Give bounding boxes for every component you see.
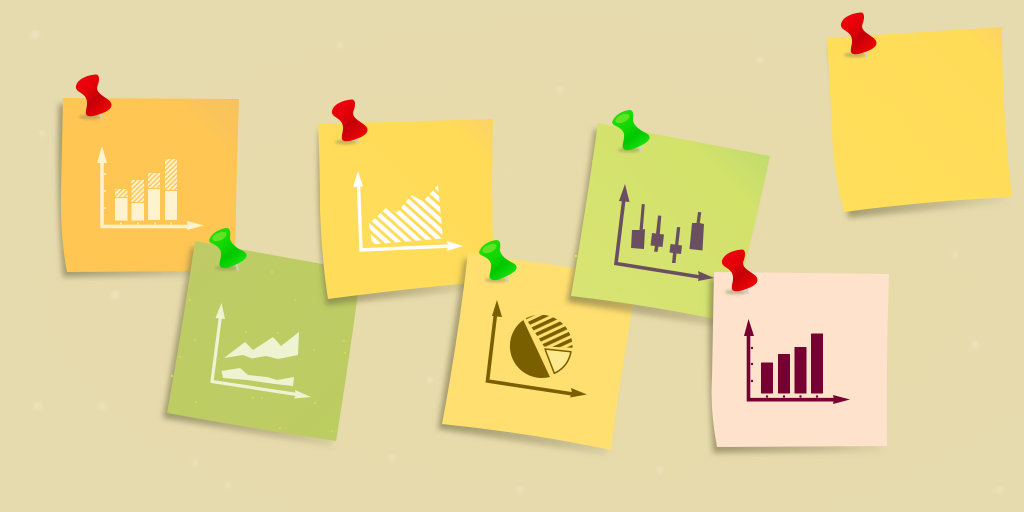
pie chart icon <box>488 300 587 398</box>
note 2: olive area chart <box>163 241 361 447</box>
note 6: peach bar chart <box>709 272 889 453</box>
yellow sheet <box>318 119 494 299</box>
note 1: orange stacked bar chart <box>58 98 239 277</box>
note 3: yellow hatched area chart <box>318 119 494 305</box>
bar chart icon <box>744 319 850 404</box>
yellow flecks <box>575 156 758 309</box>
green pin on note 4 <box>479 240 517 282</box>
lime sheet <box>571 123 770 322</box>
note 7: blank yellow sheet <box>827 27 1012 218</box>
red pin on note 1 <box>76 74 112 119</box>
candlestick chart icon <box>616 184 714 281</box>
yellow flecks <box>171 271 346 432</box>
hatched area chart icon <box>353 171 463 251</box>
olive sheet <box>167 241 361 441</box>
peach sheet <box>712 272 889 447</box>
area chart icon <box>212 303 311 398</box>
note 4: light yellow pie chart <box>438 253 638 455</box>
orange sheet <box>61 98 239 272</box>
green pin on note 5 <box>612 110 650 152</box>
red pin on note 7 <box>841 12 876 57</box>
green pin on note 2 <box>209 228 247 270</box>
red pin on note 3 <box>332 100 368 144</box>
stacked bar chart icon <box>97 146 204 230</box>
note 5: lime candlestick chart <box>567 123 770 328</box>
light yellow sheet <box>442 253 638 450</box>
red pin on note 6 <box>722 250 758 294</box>
